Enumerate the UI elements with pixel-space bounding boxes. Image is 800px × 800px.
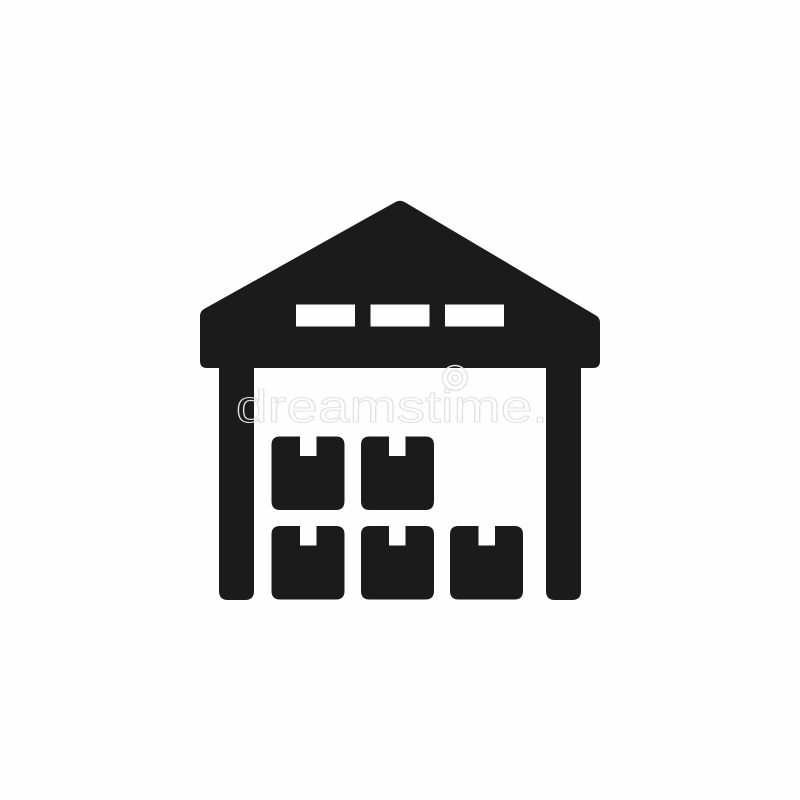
icon: warehouse	[200, 201, 600, 600]
box: bottom row left	[272, 526, 344, 600]
box: bottom row middle	[361, 526, 434, 600]
box: top row middle	[361, 436, 434, 510]
left pillar	[219, 366, 254, 600]
warehouse roof with windows	[200, 201, 600, 368]
box: bottom row right	[450, 526, 523, 600]
watermark text: dreamstime.	[236, 381, 548, 432]
watermark: dreamstime	[236, 366, 548, 432]
box: top row left	[272, 436, 344, 510]
right pillar	[546, 366, 581, 600]
watermark spiral	[442, 366, 468, 390]
